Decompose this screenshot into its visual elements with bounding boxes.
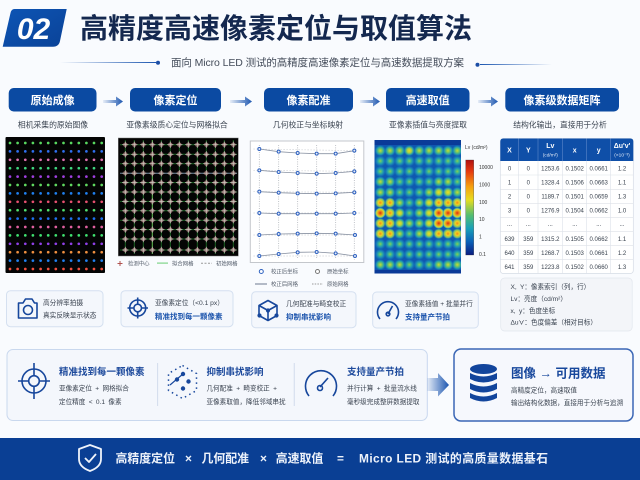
- data table: 1315.2: [541, 237, 560, 243]
- banner: [0, 438, 640, 480]
- data table: 639: [504, 237, 515, 243]
- arrow: [103, 96, 123, 106]
- data table: 359: [523, 251, 534, 257]
- panel: sub-pixel centroid grid: [118, 138, 238, 256]
- step: 像素定位: [130, 88, 221, 112]
- icon: gauge: [378, 302, 398, 319]
- table legend: Δu'v'：色度偏差（相对目标）: [510, 318, 597, 326]
- panel: three benefits: [7, 350, 427, 420]
- data table: 1.1: [618, 237, 627, 243]
- data table: 0.0662: [590, 237, 609, 243]
- data table: 0: [527, 166, 531, 172]
- data table: ...: [572, 222, 578, 228]
- data table: 1.1: [618, 180, 627, 186]
- panel: raw LED dot image: [6, 137, 105, 273]
- table header: Lv: [546, 143, 554, 150]
- data table: 0.0661: [590, 166, 609, 172]
- data table: 1.2: [618, 251, 627, 257]
- color bar legend: 10000: [479, 165, 493, 171]
- badge: section number 02: [3, 9, 67, 47]
- step: 高速取值: 高速取值: [406, 93, 450, 107]
- data table: 1.2: [618, 166, 627, 172]
- card: geometric registration: [252, 292, 356, 328]
- benefit: locating text: [59, 366, 145, 406]
- data table: 0.1505: [566, 237, 585, 243]
- data table: 1268.7: [541, 251, 560, 257]
- data table: 1: [508, 180, 512, 186]
- card: high-res capture: 真实反映显示状态: [43, 310, 97, 320]
- legend: locating chart: 检测中心: [128, 260, 150, 268]
- caption: extraction: 亚像素插值与亮度提取: [389, 120, 467, 130]
- card: interpolation: 亚像素插值 + 批量并行: [405, 299, 473, 308]
- card: sub-pixel locating: 亚像素定位（<0.1 px）: [155, 298, 224, 307]
- benefit: throughput text: [347, 366, 420, 406]
- legend: registration chart: 原始坐标: [327, 268, 349, 276]
- table header: X: [507, 148, 512, 154]
- table legend: [501, 278, 632, 331]
- data table: 1328.4: [541, 180, 560, 186]
- subtitle: [60, 56, 552, 69]
- table header: Y: [526, 148, 531, 154]
- legend: registration chart: 校正后坐标: [271, 268, 299, 276]
- data table: 0: [527, 208, 531, 214]
- data table: 0.0661: [590, 251, 609, 257]
- legend: registration chart: 原始网格: [327, 280, 349, 288]
- benefit: locating text: 亚像素定位 + 网格拟合: [59, 384, 129, 392]
- card: sub-pixel locating: 精准找到每一颗像素: [155, 311, 223, 321]
- legend: registration chart: [255, 268, 349, 288]
- table legend: Lv：亮度（cd/m²）: [510, 294, 567, 303]
- color bar legend: 100: [479, 200, 488, 206]
- icon: database: [470, 364, 497, 402]
- panel: result: 图像 → 可用数据: [511, 366, 605, 380]
- benefit: throughput text: 并行计算 + 批量流水线: [347, 384, 417, 392]
- legend: locating chart: 拟合网格: [172, 260, 194, 268]
- data table: ...: [619, 222, 625, 228]
- card: interpolation: [373, 292, 478, 328]
- banner: Micro LED 测试的高质量数据基石: [359, 452, 548, 466]
- data table: 359: [523, 237, 534, 243]
- data table: ...: [548, 222, 553, 228]
- step: 像素配准: 像素配准: [286, 93, 330, 107]
- color bar legend: 10: [479, 217, 485, 223]
- data table: 0.1502: [566, 166, 585, 172]
- benefit: crosstalk text: 亚像素取值，降低邻域串扰: [206, 397, 286, 406]
- legend: locating chart: 初始网格: [216, 260, 238, 268]
- banner: 高速取值: [276, 452, 323, 466]
- step: 高速取值: [386, 88, 470, 112]
- panel: result: 输出结构化数据，直接用于分析与追溯: [511, 398, 623, 407]
- data table: 0.1504: [566, 208, 585, 214]
- banner: ×: [185, 452, 192, 466]
- data table: 0.1506: [566, 180, 585, 186]
- benefit: locating text: 精准找到每一颗像素: [59, 366, 145, 378]
- data table: ...: [507, 222, 512, 228]
- card: geometric registration: 抑制串扰影响: [286, 312, 331, 322]
- table legend: X, Y：像素索引（列，行）: [510, 282, 590, 291]
- table header: x: [573, 148, 577, 154]
- data table: 2: [508, 194, 512, 200]
- benefit: throughput text: 支持量产节拍: [347, 366, 404, 378]
- data table: 640: [504, 251, 515, 257]
- benefit: locating text: 定位精度 < 0.1 像素: [59, 397, 122, 406]
- icon: cube: [258, 300, 278, 320]
- table header: (cd/m²): [543, 152, 558, 158]
- icon: camera: [18, 299, 37, 318]
- data table: 0: [527, 194, 531, 200]
- data table: 1.0: [618, 208, 627, 214]
- banner: 几何配准: [202, 452, 249, 466]
- legend: registration chart: 校正后网格: [271, 280, 299, 288]
- card: geometric registration: 几何配准与畸变校正: [286, 299, 346, 308]
- arrow: [360, 96, 380, 106]
- step: 原始成像: [9, 88, 97, 112]
- arrow: to result: [427, 373, 449, 396]
- table header: [500, 138, 633, 161]
- card: sub-pixel locating: [121, 291, 233, 327]
- table header: y: [597, 148, 601, 154]
- icon: target: [128, 298, 148, 318]
- legend: locating chart: [118, 260, 238, 268]
- step: 像素定位: 像素定位: [154, 93, 198, 107]
- table header: (×10⁻³): [614, 152, 630, 158]
- icon: shield: [79, 445, 101, 471]
- data table: ...: [596, 222, 602, 228]
- step: 像素级数据矩阵: 像素级数据矩阵: [524, 93, 600, 107]
- step: 像素配准: [264, 88, 353, 112]
- data table: 359: [523, 265, 534, 271]
- panel: geometric registration chart: [250, 141, 364, 262]
- data table: 0.1501: [566, 194, 585, 200]
- data table: 0.1503: [566, 251, 585, 257]
- data table: 0.0662: [590, 208, 609, 214]
- color bar legend: 1000: [479, 182, 490, 188]
- data table: 1223.8: [541, 265, 560, 271]
- card: high-res capture: [6, 291, 103, 327]
- table legend: x, y：色度坐标: [510, 306, 556, 315]
- panel: result: 高精度定位，高速取值: [511, 386, 577, 394]
- data table: 0: [527, 180, 531, 186]
- card: interpolation: 支持量产节拍: [405, 312, 450, 322]
- icon: gauge: [306, 371, 336, 396]
- caption: locating: 亚像素级质心定位与网格拟合: [126, 120, 228, 130]
- data table: 0.0660: [590, 265, 609, 271]
- caption: registration: 几何校正与坐标映射: [273, 120, 343, 130]
- icon: target: [18, 363, 50, 399]
- data table: 1253.6: [541, 166, 560, 172]
- data table: 1.3: [618, 194, 627, 200]
- data table: 3: [508, 208, 512, 214]
- data table: ...: [526, 222, 531, 228]
- subtitle: 面向 Micro LED 测试的高精度高速像素定位与高速数据提取方案: [171, 56, 464, 69]
- color bar legend: 1: [479, 234, 482, 240]
- data table: 0.0659: [590, 194, 609, 200]
- data table: 1.3: [618, 265, 627, 271]
- color bar legend: 0.1: [479, 252, 486, 258]
- card: high-res capture: 高分辨率拍摄: [43, 298, 83, 307]
- data table: [500, 138, 633, 274]
- table header: Δu'v': [614, 143, 631, 150]
- data table: 1189.7: [541, 194, 560, 200]
- caption: matrix: 结构化输出，直接用于分析: [513, 120, 607, 130]
- step: 像素级数据矩阵: [505, 88, 619, 112]
- data table: 641: [504, 265, 515, 271]
- panel: luminance heat map: [374, 140, 463, 274]
- benefit: throughput text: 毫秒级完成整屏数据提取: [347, 397, 420, 406]
- benefit: crosstalk text: [206, 366, 286, 406]
- banner: 高精度定位: [116, 452, 175, 466]
- panel: result: [454, 349, 633, 421]
- title: 高精度高速像素定位与取值算法: [80, 12, 472, 44]
- badge: section number 02: 02: [17, 13, 50, 46]
- step: 原始成像: 原始成像: [31, 93, 75, 107]
- banner: =: [337, 452, 344, 466]
- data table: 0.1502: [566, 265, 585, 271]
- data table: 0: [508, 166, 512, 172]
- caption: raw image: 相机采集的原始图像: [18, 120, 88, 130]
- data table: 0.0663: [590, 180, 609, 186]
- arrow: [230, 96, 252, 106]
- color bar legend: Lv (cd/m²): [465, 145, 488, 151]
- banner: ×: [260, 452, 267, 466]
- benefit: crosstalk text: 几何配准 + 畸变校正 +: [206, 384, 277, 392]
- data table: 1276.9: [541, 208, 560, 214]
- benefit: crosstalk text: 抑制串扰影响: [206, 366, 264, 378]
- icon: crosstalk hexagon: [168, 366, 196, 398]
- color bar legend: [465, 145, 493, 258]
- arrow: [478, 96, 498, 106]
